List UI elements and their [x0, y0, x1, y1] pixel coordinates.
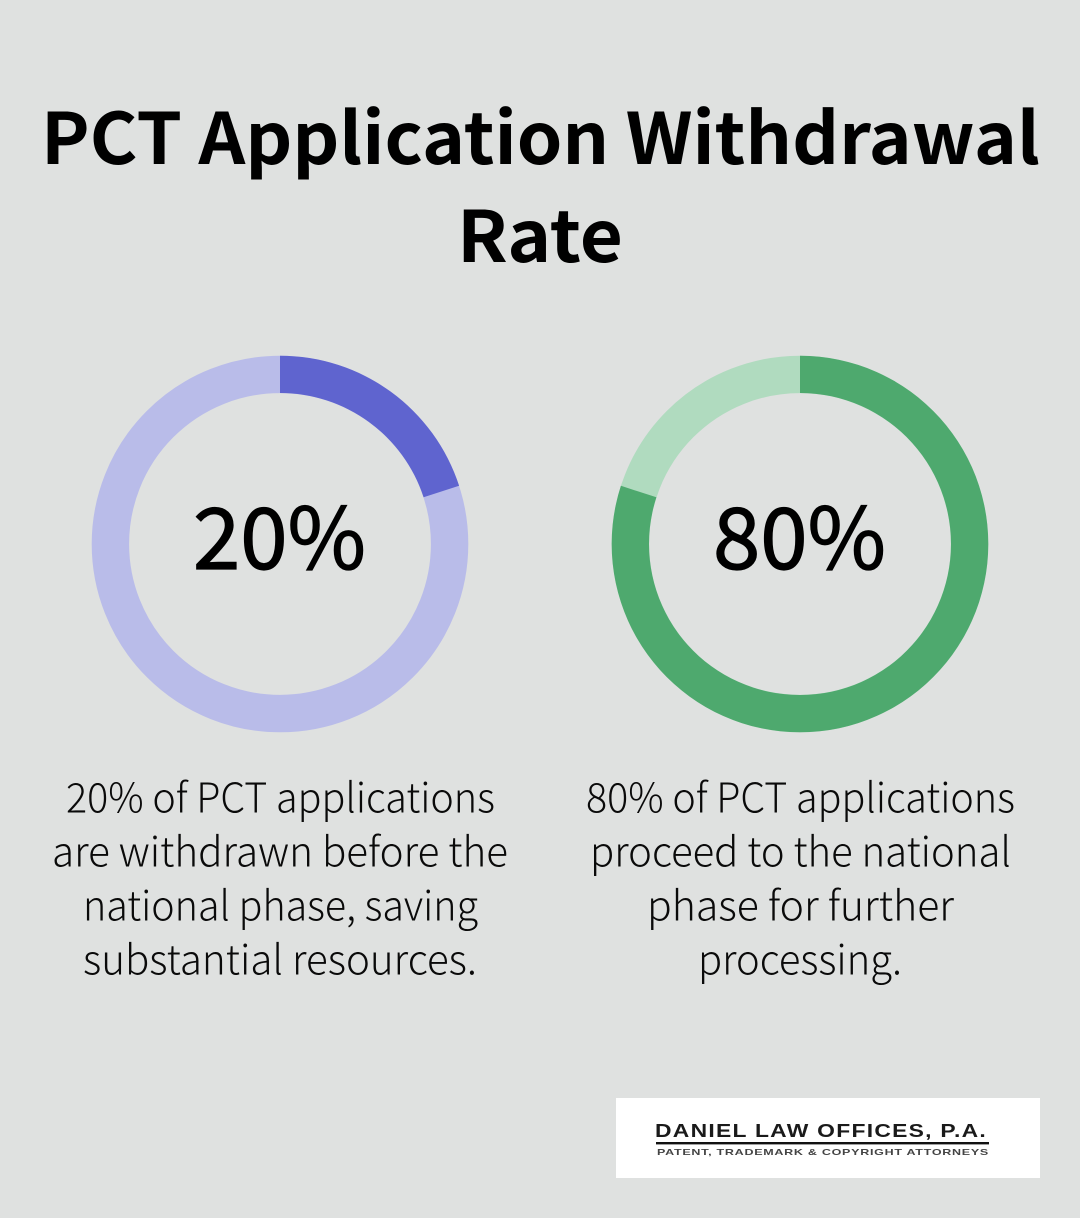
text block: 80% description: processing. [698, 926, 902, 986]
donut value: 20%: 20% [193, 471, 366, 594]
logo: Daniel Law Offices: PATENT, TRADEMARK & COPYRIGHT ATTORNEYS [657, 1147, 989, 1157]
text block: 80% description: proceed to the national [590, 818, 1011, 878]
donut chart: 20% withdrawn [110, 356, 459, 714]
donut segment: 80% [612, 356, 988, 732]
donut value: 80%: 80% [713, 471, 886, 594]
text block: 20% description: national phase, saving [83, 872, 478, 932]
text block: 20% description: are withdrawn before the [52, 818, 508, 878]
logo: Daniel Law Offices: DANIEL LAW OFFICES, P.A. [655, 1121, 987, 1141]
title: PCT Application Withdrawal [41, 83, 1040, 185]
text block: 80% description: phase for further [647, 872, 954, 932]
logo: Daniel Law Offices [616, 1098, 1040, 1178]
title [41, 83, 1040, 283]
text block: 80% description: 80% of PCT applications [586, 764, 1015, 824]
text block: 20% description [52, 764, 508, 986]
donut chart: 80% proceed [612, 356, 988, 732]
title: Rate [457, 181, 623, 283]
text block: 20% description: 20% of PCT applications [66, 764, 495, 824]
text block: 80% description [586, 764, 1015, 986]
text block: 20% description: substantial resources. [83, 926, 477, 986]
donut segment: 20% [280, 356, 459, 497]
